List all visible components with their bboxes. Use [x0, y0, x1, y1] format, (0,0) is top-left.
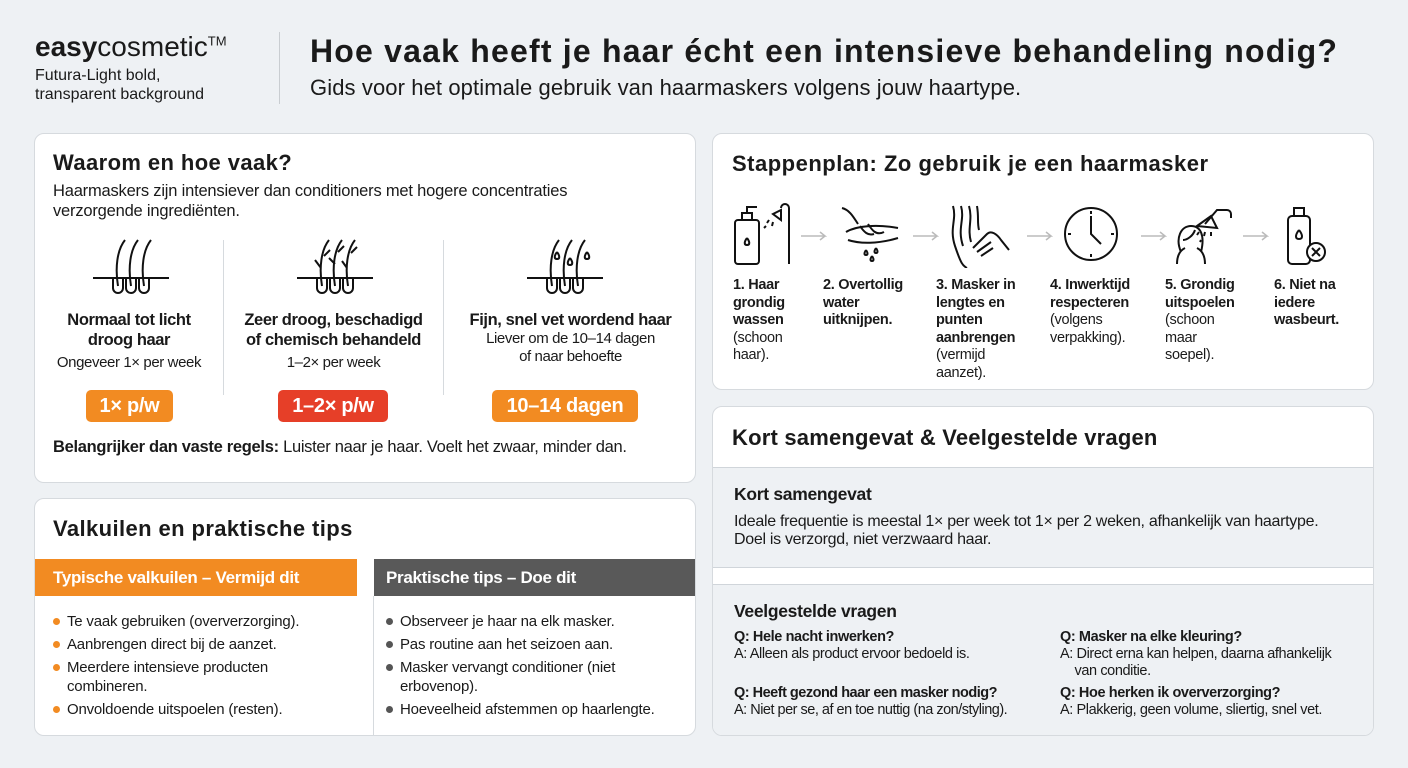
summary box: Ideale frequentie is meestal 1× per week tot 1× per 2 weken, afhankelijk van haartype. [734, 513, 1318, 530]
FAQ box: A: Plakkerig, geen volume, sliertig, snel vet. [1060, 702, 1322, 718]
panel: samenvatting en FAQ [712, 406, 1374, 736]
FAQ box: Q: Hoe herken ik oververzorging? [1060, 685, 1280, 701]
summary box: Doel is verzorgd, niet verzwaard haar. [734, 531, 991, 548]
logo: Futura-Light bold, [35, 67, 160, 84]
icon: damaged hair [297, 239, 373, 294]
column text: droog haar [88, 331, 170, 349]
panel: stappenplan: (volgens verpakking). [1050, 312, 1125, 346]
panel: stappenplan: Stappenplan: Zo gebruik je een haarmasker [732, 151, 1209, 176]
panel: waarom en hoe vaak: 1–2× per week [287, 354, 380, 371]
step texts: 1. Haar grondig wassen [733, 277, 785, 328]
panel: waarom en hoe vaak: of chemisch behandeld [246, 331, 421, 349]
icon: apply mask [952, 206, 1010, 268]
FAQ box: A: Niet per se, af en toe nuttig (na zon/styling). [734, 702, 1007, 718]
subtitle: Gids voor het optimale gebruik van haarmaskers volgens jouw haartype. [310, 75, 1021, 100]
column text [57, 311, 202, 371]
icon: wring hair [842, 207, 898, 262]
panel: waarom en hoe vaak: of naar behoefte [519, 348, 622, 365]
panel: valkuilen en tips: Meerdere intensieve producten combineren. [67, 659, 268, 695]
panel: waarom en hoe vaak: Haarmaskers zijn intensiever dan conditioners met hogere concentraties [53, 182, 567, 200]
step texts: (schoon haar). [733, 330, 782, 363]
summary box [713, 467, 1375, 568]
FAQ box [713, 584, 1375, 737]
icon: bottle no [1287, 207, 1326, 265]
panel: valkuilen en tips: Observeer je haar na elk masker. [400, 613, 615, 630]
panel: waarom en hoe vaak: Waarom en hoe vaak? [53, 150, 292, 175]
title: Hoe vaak heeft je haar écht een intensieve behandeling nodig? [310, 33, 1338, 69]
icon: fine oily hair [527, 239, 603, 294]
panel: stappenplan: (vermijd aanzet). [936, 347, 986, 380]
panel: waarom en hoe vaak: verzorgende ingrediënten. [53, 202, 240, 220]
FAQ box: A: Alleen als product ervoor bedoeld is. [734, 646, 970, 662]
icon: rinse [1176, 209, 1232, 264]
logo: easycosmeticTM [35, 31, 227, 62]
logo [35, 31, 227, 103]
FAQ box: Veelgestelde vragen [734, 601, 897, 621]
badges: 1× p/w [100, 395, 159, 417]
panel: valkuilen en tips: Pas routine aan het seizoen aan. [400, 636, 613, 653]
column text: Ongeveer 1× per week [57, 354, 201, 371]
panel: stappenplan: 3. Masker in lengtes en punten aanbrengen [936, 277, 1015, 346]
panel: waarom en hoe vaak: Fijn, snel vet wordend haar [470, 311, 671, 329]
panel: valkuilen en tips: Masker vervangt conditioner (niet erbovenop). [400, 659, 615, 695]
column text: Normaal tot licht [67, 311, 191, 329]
panel: valkuilen en tips: Typische valkuilen – Vermijd dit [53, 568, 299, 587]
logo: transparent background [35, 86, 204, 103]
panel: valkuilen en tips: Aanbrengen direct bij de aanzet. [67, 636, 277, 653]
panel: stappenplan: (schoon maar soepel). [1165, 312, 1214, 363]
panel: stappenplan: 2. Overtollig water uitknijpen. [823, 277, 903, 328]
panel: waarom en hoe vaak: 1–2× p/w [292, 395, 374, 417]
icon: normal hair [93, 239, 169, 294]
panel: valkuilen en tips [34, 498, 696, 736]
badges [86, 390, 173, 422]
FAQ box: A: Direct erna kan helpen, daarna afhankelijk [1060, 646, 1331, 662]
panel: valkuilen en tips: Onvoldoende uitspoelen (resten). [67, 701, 282, 718]
panel: waarom en hoe vaak: Zeer droog, beschadigd [244, 311, 423, 329]
panel: samenvatting en FAQ: Kort samengevat & Veelgestelde vragen [732, 425, 1158, 450]
icon: clock [1064, 207, 1118, 261]
panel: valkuilen en tips: Te vaak gebruiken (oververzorging). [67, 613, 299, 630]
summary box: Kort samengevat [734, 484, 872, 504]
panel: waarom en hoe vaak: 10–14 dagen [507, 395, 623, 417]
panel: waarom en hoe vaak [34, 133, 696, 483]
panel: stappenplan: 6. Niet na iedere wasbeurt. [1274, 277, 1339, 328]
panel: stappenplan: 5. Grondig uitspoelen [1165, 277, 1235, 310]
FAQ box: van conditie. [1074, 663, 1151, 679]
footer note: Belangrijker dan vaste regels: Luister naar je haar. Voelt het zwaar, minder dan. [53, 438, 627, 456]
panel: valkuilen en tips: Hoeveelheid afstemmen op haarlengte. [400, 701, 655, 718]
panel: waarom en hoe vaak: Liever om de 10–14 dagen [486, 330, 655, 347]
icon: bottle shower [734, 203, 790, 265]
arrows [801, 232, 1269, 240]
panel: valkuilen en tips: Valkuilen en praktische tips [53, 516, 353, 541]
panel: stappenplan [712, 133, 1374, 390]
FAQ box: Q: Masker na elke kleuring? [1060, 629, 1242, 645]
FAQ box: Q: Heeft gezond haar een masker nodig? [734, 685, 997, 701]
step texts [733, 277, 785, 363]
panel: stappenplan: 4. Inwerktijd respecteren [1050, 277, 1130, 310]
FAQ box: Q: Hele nacht inwerken? [734, 629, 894, 645]
panel: valkuilen en tips: Praktische tips – Doe dit [386, 568, 576, 587]
